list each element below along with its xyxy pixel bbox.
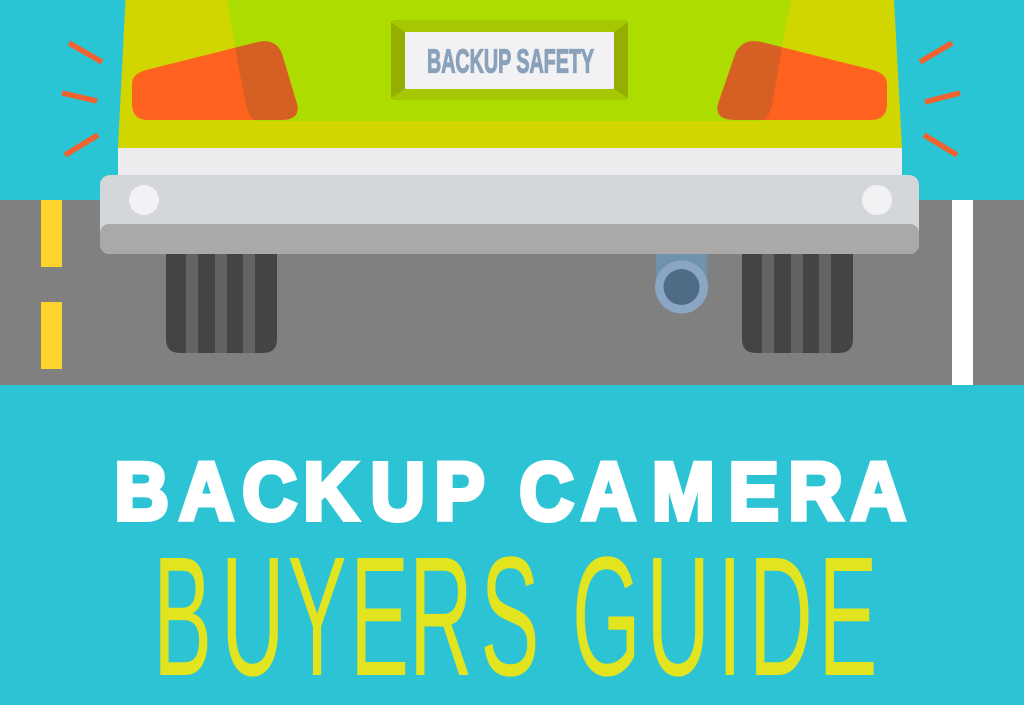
backup camera — [655, 254, 708, 314]
left tail light — [132, 41, 298, 120]
license plate — [391, 20, 628, 100]
left light rays — [62, 43, 102, 155]
green rear panel — [227, 0, 791, 121]
bumper — [100, 175, 919, 254]
sky background — [0, 0, 1024, 200]
car body — [118, 0, 902, 176]
plate text: BACKUP SAFETY — [427, 42, 594, 80]
right tail light — [717, 41, 887, 120]
road — [0, 200, 1024, 385]
right tire — [742, 254, 853, 353]
white trim band — [118, 148, 902, 176]
right light rays — [920, 43, 960, 155]
left reflector — [129, 185, 159, 215]
yellow lane dashes — [41, 200, 62, 369]
title: backup camera: BACKUP CAMERA — [114, 446, 906, 537]
right reflector — [862, 185, 892, 215]
white edge line — [952, 200, 973, 385]
left tire — [166, 254, 277, 353]
lower panel background — [0, 385, 1024, 705]
